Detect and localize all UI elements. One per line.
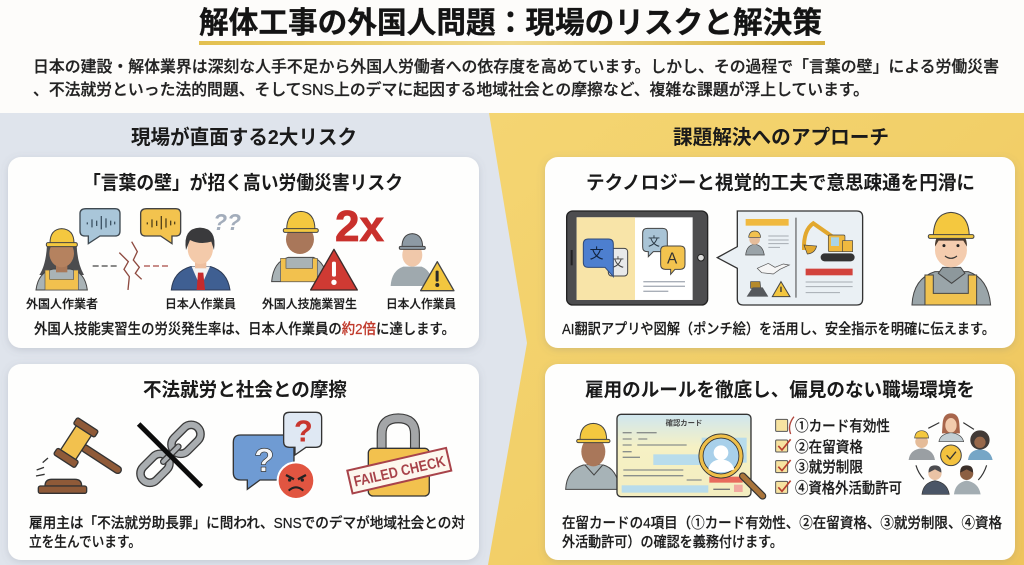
card heading: テクノロジーと視覚的工夫で意思疎通を円滑に [586,172,975,194]
icon labels: 日本人作業員 [386,296,456,311]
card heading: 雇用のルールを徹底し、偏見のない職場環境を [585,379,975,401]
caption: 在留カードの4項目（①カード有効性、②在留資格、③就労制限、④資格 [562,515,1002,532]
icon: Japanese worker in suit [171,228,230,290]
confused question marks: ?? [213,209,241,235]
icon: Japanese worker with yellow warning [391,234,454,291]
check items [795,418,902,497]
icon: translation tablet [567,211,708,305]
check items: ②在留資格 [795,439,863,456]
icon: smiling worker [912,212,991,305]
icon: translation tablet: 文 [612,256,624,270]
icon: rumor bubbles and angry face: ? [254,443,274,480]
icon: residence card under magnifier [617,414,763,497]
icon: residence card under magnifier: 確認カード [666,418,702,427]
2x multiplier: 2x [335,202,385,251]
icon: yellow speech bubble [141,209,181,244]
panel: technology and visual communication [545,157,1015,348]
card heading: 不法就労と社会との摩擦 [143,379,347,401]
panel: left grey background [0,113,530,565]
icon labels: 日本人作業員 [165,296,236,311]
icon: translation tablet: 文 [590,245,604,261]
icon: trainee with red warning [272,211,357,290]
intro text [33,58,999,99]
icon: rumor bubbles and angry face [233,412,322,499]
check items: ④資格外活動許可 [795,480,902,497]
icon: padlock with failed check stamp [347,418,451,496]
intro text: 日本の建設・解体業界は深刻な人手不足から外国人労働者への依存度を高めています。しかし、その過程で「言葉の壁」による労働災害 [33,58,999,76]
check items: ③就労制限 [795,459,863,476]
check boxes [776,417,794,493]
check items: ①カード有効性 [795,418,890,435]
icon: blue speech bubble [80,209,120,244]
icon: diverse team circle [909,413,993,494]
icon: padlock with failed check stamp: FAILED CHECK [352,453,447,491]
caption: AI翻訳アプリや図解（ポンチ絵）を活用し、安全指示を明確に伝えます。 [562,321,995,338]
body text: 雇用主は「不法就労助長罪」に問われ、SNSでのデマが地域社会との対 [29,514,465,532]
card heading: 「言葉の壁」が招く高い労働災害リスク [83,171,403,194]
icon: translation tablet: 文 [648,235,660,249]
panel: language barrier risk [8,157,479,348]
caption: 外活動許可）の確認を義務付けます。 [562,534,783,551]
icon labels [26,296,456,311]
icon: translation tablet: A [667,250,678,267]
caption with highlighted 2x: 外国人技能実習生の労災発生率は、日本人作業員の約2倍に達します。 [34,321,455,338]
panel: right yellow chevron background [488,113,1024,565]
body text: 立を生んでいます。 [29,534,141,551]
panel: employment rules and workplace [545,364,1015,560]
icon: gavel [36,417,133,493]
panel: illegal work and social friction [8,364,479,560]
icon labels: 外国人技施業習生 [262,296,357,311]
icon labels: 外国人作業者 [26,296,98,311]
checklist [776,417,902,497]
icon: illustrated safety manual [717,211,863,305]
title underline [199,41,825,45]
intro text: 、不法就労といった法的問題、そしてSNS上のデマに起因する地域社会との摩擦など、複雑な課題が浮上しています。 [33,80,869,99]
icon: worker beside card [566,423,620,489]
icon: rumor bubbles and angry face: ? [294,415,313,449]
heading: left section: 現場が直面する2大リスク [131,125,357,149]
body text [29,514,465,551]
heading: right section: 課題解決へのアプローチ [673,126,889,149]
icon: foreign worker [36,229,87,290]
title: 解体工事の外国人問題：現場のリスクと解決策 [199,7,822,40]
caption [562,515,1002,551]
miscommunication zigzag [93,242,169,290]
icon: broken chain [137,421,204,487]
